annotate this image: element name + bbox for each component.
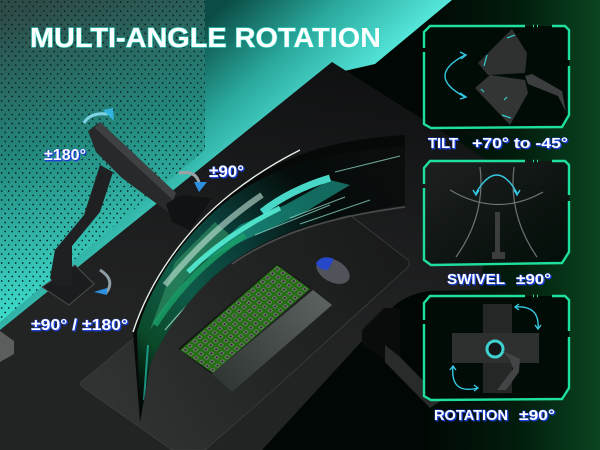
desk leg bbox=[362, 308, 442, 408]
swivel arrow bbox=[473, 175, 520, 195]
swivel stand bbox=[492, 212, 505, 259]
tilt arm bbox=[525, 74, 566, 112]
wrist rest bbox=[212, 290, 332, 392]
small box at left edge bbox=[0, 331, 14, 362]
upper arm bbox=[88, 122, 176, 212]
screen bbox=[137, 146, 405, 422]
desk surface bbox=[0, 62, 495, 450]
monitor back bezel bbox=[133, 135, 405, 422]
label: plus-minus 90: ±90° bbox=[209, 162, 244, 181]
arrow: top pivot bbox=[84, 108, 114, 123]
rotation monitor horizontal bbox=[452, 333, 539, 363]
label: tilt range: +70° to -45° bbox=[472, 135, 568, 152]
monitor mount bbox=[166, 195, 212, 230]
arm base bbox=[42, 265, 94, 305]
monitor bbox=[133, 135, 405, 422]
perforated panel bbox=[0, 0, 205, 322]
background: teal wall bbox=[0, 0, 452, 340]
label: tilt: TILT bbox=[428, 135, 458, 152]
panel: rotation bbox=[424, 296, 569, 400]
monitor white top edge bbox=[133, 150, 300, 332]
keyboard bbox=[178, 264, 332, 392]
label: swivel range: ±90° bbox=[516, 271, 551, 288]
arm post and lower arm bbox=[50, 165, 113, 287]
mouse bbox=[312, 253, 354, 289]
monitor stand lip bbox=[232, 207, 405, 264]
label: rotation: ROTATION bbox=[434, 407, 508, 424]
panel: swivel bbox=[424, 161, 569, 265]
rotation monitor vertical bbox=[483, 304, 512, 393]
rotation arrows bbox=[450, 304, 541, 391]
swivel monitor curves bbox=[450, 167, 543, 257]
label: rotation range: ±90° bbox=[519, 407, 555, 424]
label: base rotation: ±90° / ±180° bbox=[31, 317, 128, 334]
title: MULTI-ANGLE ROTATION bbox=[30, 22, 381, 53]
label: plus-minus 180: ±180° bbox=[44, 147, 86, 164]
label: swivel: SWIVEL bbox=[447, 271, 505, 288]
desk mat bbox=[80, 215, 409, 450]
monitor arm bbox=[42, 122, 212, 305]
tilt screen accents bbox=[481, 35, 515, 118]
panel: tilt bbox=[424, 26, 569, 128]
tilt monitor upper bbox=[478, 29, 527, 75]
arrow: base pivot bbox=[94, 270, 110, 295]
tilt arrow bbox=[445, 52, 466, 99]
rotation arm bbox=[497, 351, 520, 390]
screen artwork streaks bbox=[144, 156, 400, 400]
arrow: mount pivot bbox=[179, 172, 207, 192]
rotation hub bbox=[487, 341, 503, 357]
tilt monitor lower bbox=[475, 75, 528, 125]
